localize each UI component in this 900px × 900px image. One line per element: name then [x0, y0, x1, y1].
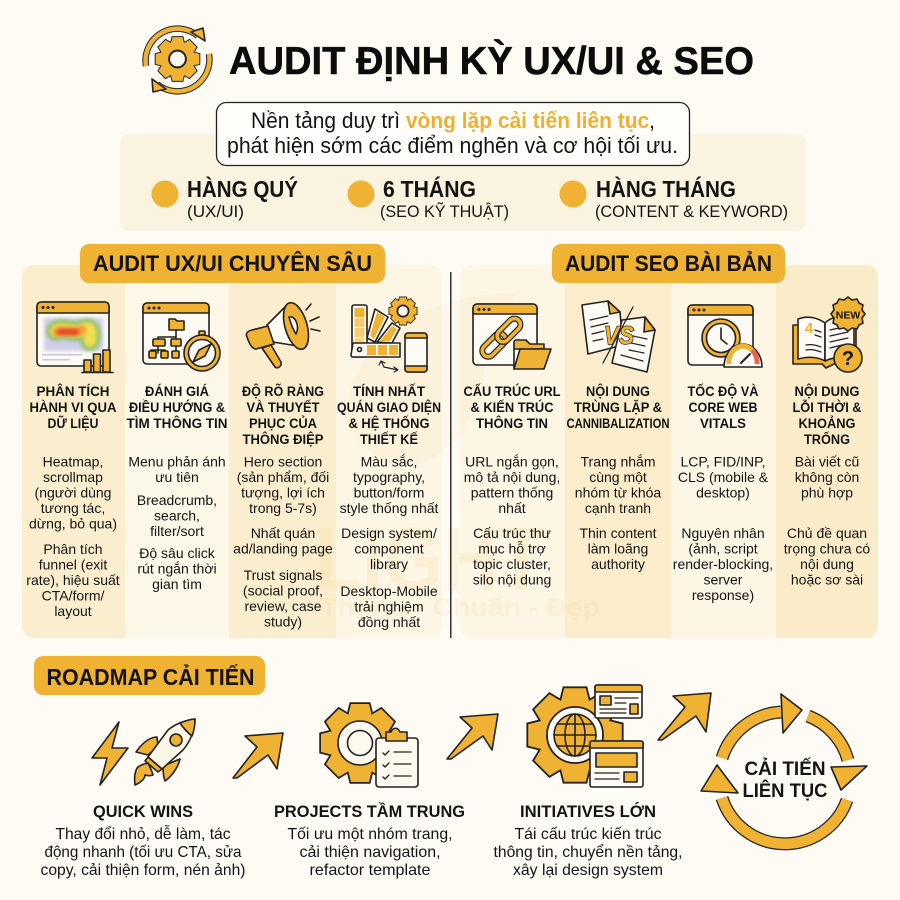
icon: book, new badge and question: 4 — [805, 320, 814, 337]
cycle: continuous improvement: LIÊN TỤC — [742, 780, 828, 802]
text: tượng, lợi ích — [241, 484, 325, 500]
column: speed — [673, 305, 773, 603]
text: Chủ đề quan — [787, 525, 867, 541]
description — [288, 826, 452, 879]
heading — [464, 382, 561, 432]
icon: gear and clipboard — [321, 704, 418, 787]
text: response) — [692, 587, 754, 603]
watermark: Thông - Chuẩn - Đẹp — [320, 594, 600, 622]
heading: HÀNH VI QUA — [30, 399, 116, 416]
text: rút ngắn thời — [137, 560, 217, 576]
subtitle box: phát hiện sớm các điểm nghẽn và cơ hội tối ưu. — [227, 133, 678, 158]
text: typography, — [353, 469, 425, 485]
watermark: LIGHT — [315, 510, 545, 610]
text: hoặc sơ sài — [791, 572, 863, 588]
text: Design system/ — [341, 525, 437, 541]
heading: audit SEO: AUDIT SEO BÀI BẢN — [565, 251, 772, 276]
text: nội dung — [800, 556, 854, 572]
icon: gear, globe and windows — [528, 685, 643, 787]
frequency: quarterly — [152, 175, 298, 221]
text: tương tác, — [41, 500, 105, 516]
column: duplicate content — [566, 301, 670, 572]
panel: left audit background — [22, 265, 442, 638]
description — [40, 824, 246, 879]
text — [784, 454, 870, 588]
text: (social proof, — [243, 582, 323, 598]
text: dừng, bỏ qua) — [29, 516, 117, 532]
text: review, case — [244, 598, 322, 614]
arrow: step two to three — [447, 714, 498, 759]
heading: NỘI DUNG — [586, 382, 650, 400]
description: Tái cấu trúc kiến trúc — [514, 826, 662, 843]
heading: VÀ THUYẾT — [246, 399, 320, 416]
heading: THÔNG TIN — [476, 414, 548, 432]
text: component — [354, 540, 424, 556]
text: funnel (exit — [39, 556, 107, 572]
text: button/form — [354, 484, 424, 500]
panel: audit frequency — [120, 134, 806, 231]
heading: TRÙNG LẶP & — [574, 398, 662, 416]
subtitle box: Nền tảng duy trì vòng lặp cải tiến liên tục, — [251, 108, 655, 133]
text: ưu tiên — [155, 469, 199, 485]
description: cải thiện navigation, — [300, 844, 440, 861]
heading: CẤU TRÚC URL — [464, 382, 561, 400]
heading — [688, 382, 758, 432]
frequency: six months: (SEO KỸ THUẬT) — [380, 202, 509, 221]
heading: VITALS — [700, 416, 746, 432]
text: trải nghiệm — [354, 598, 424, 614]
text: CTA/form/ — [42, 588, 104, 604]
text: Màu sắc, — [361, 454, 417, 470]
column: outdated content — [784, 297, 870, 588]
heading: NỘI DUNG — [794, 382, 860, 400]
description: xây lại design system — [513, 862, 663, 879]
heading: QUÁN GIAO DIỆN — [337, 398, 441, 416]
text — [233, 454, 333, 630]
text: trong 5-7s) — [249, 500, 317, 516]
heading: & KIẾN TRÚC — [470, 398, 554, 416]
description: Thay đổi nhỏ, dễ làm, tác — [56, 824, 231, 843]
heading: LỖI THỜI & — [792, 398, 862, 416]
icon: clock and gauge — [688, 305, 762, 367]
description: refactor template — [310, 862, 430, 879]
center divider — [450, 272, 452, 638]
text: đồng nhất — [358, 614, 420, 630]
column: design consistency — [337, 297, 441, 630]
text: study) — [264, 614, 302, 630]
text: silo nội dung — [473, 572, 551, 588]
heading: ĐỘ RÕ RÀNG — [242, 382, 324, 400]
text: CLS (mobile & — [678, 469, 769, 485]
text: nhất — [498, 500, 526, 516]
heading: THÔNG ĐIỆP — [242, 430, 324, 448]
icon: lightning and rocket — [92, 719, 195, 785]
frequency: monthly: HÀNG THÁNG — [596, 175, 736, 202]
text: server — [704, 572, 743, 588]
heading: audit SEO — [552, 244, 785, 283]
heading — [792, 382, 862, 448]
text: search, — [154, 508, 200, 524]
text: style thống nhất — [340, 500, 439, 516]
text: Breadcrumb, — [137, 492, 217, 508]
description: copy, cải thiện form, nén ảnh) — [40, 862, 246, 879]
text: Phân tích — [43, 541, 103, 557]
description — [494, 826, 682, 879]
arrow: step one to two — [233, 733, 283, 778]
frequency: monthly — [560, 175, 788, 221]
icon: chain and folder — [473, 304, 551, 369]
text: Bài viết cũ — [795, 454, 859, 470]
heading — [566, 382, 670, 432]
text: (người dùng — [35, 484, 111, 500]
heading: TỐC ĐỘ VÀ — [688, 382, 758, 400]
icon: heatmap window — [37, 302, 113, 372]
heading — [242, 382, 324, 448]
text — [26, 454, 120, 619]
text: (ảnh, script — [688, 540, 758, 556]
heading: ĐIỀU HƯỚNG & — [129, 398, 225, 416]
text: Hero section — [244, 454, 322, 470]
text: scrollmap — [43, 469, 103, 485]
heading: audit UX/UI — [80, 244, 385, 283]
text: trọng chưa có — [784, 540, 870, 556]
text: authority — [591, 556, 645, 572]
label: QUICK WINS — [93, 802, 193, 821]
text — [673, 454, 773, 603]
frequency: quarterly: HÀNG QUÝ — [187, 175, 298, 202]
text: Trust signals — [244, 567, 322, 583]
text: Nguyên nhân — [681, 525, 765, 541]
heading: TÌM THÔNG TIN — [126, 414, 228, 432]
heading: roadmap: ROADMAP CẢI TIẾN — [46, 662, 254, 690]
frequency: six months: 6 THÁNG — [383, 175, 476, 202]
column: navigation — [126, 303, 228, 592]
step: initiatives — [494, 685, 682, 879]
heading: ĐÁNH GIÁ — [145, 383, 209, 400]
text: Độ sâu click — [139, 545, 216, 561]
text: URL ngắn gọn, — [465, 454, 559, 470]
icon: gear with cycle arrows — [146, 28, 209, 92]
text: LCP, FID/INP, — [680, 454, 766, 470]
cycle: continuous improvement — [701, 694, 867, 844]
icon: two documents versus: VS — [604, 322, 634, 350]
column: URL structure — [464, 304, 561, 588]
subtitle box — [216, 102, 690, 166]
icon: two documents versus — [582, 301, 655, 372]
icon: book, new badge and question: ? — [842, 348, 854, 370]
label: PROJECTS TẦM TRUNG — [274, 802, 465, 821]
heading — [126, 383, 228, 432]
text — [464, 454, 560, 588]
description: động nhanh (tối ưu CTA, sửa — [44, 844, 242, 861]
heading: DỮ LIỆU — [48, 414, 98, 432]
text: Thin content — [579, 525, 657, 541]
text: mô tả nội dung, — [464, 469, 560, 485]
heading — [337, 383, 441, 448]
text: Trang nhắm — [581, 454, 655, 470]
text: desktop) — [696, 484, 750, 500]
text: library — [370, 556, 408, 572]
icon: book, new badge and question — [793, 297, 865, 372]
text: không còn — [795, 469, 859, 485]
heading: PHÂN TÍCH — [36, 382, 110, 400]
panel: right audit background — [460, 265, 878, 638]
text: render-blocking, — [673, 556, 773, 572]
watermark — [315, 292, 600, 622]
text: Menu phản ánh — [128, 454, 226, 470]
arrow: step three to cycle — [658, 693, 711, 740]
text: mục hỗ trợ — [478, 540, 546, 556]
text: nhóm từ khóa — [575, 484, 661, 500]
text: pattern thống — [471, 484, 553, 500]
text: topic cluster, — [473, 556, 551, 572]
text: cùng một — [589, 469, 647, 485]
description: thông tin, chuyển nền tảng, — [494, 843, 682, 861]
heading — [30, 382, 116, 432]
heading: TÍNH NHẤT — [353, 383, 425, 400]
heading: & HỆ THỐNG — [348, 414, 430, 432]
column: behaviour analysis — [26, 302, 120, 619]
text — [575, 454, 661, 572]
heading: KHOẢNG — [798, 415, 856, 432]
icon: swatches, gear and phone — [351, 297, 427, 372]
text: gian tìm — [152, 576, 202, 592]
text — [340, 454, 439, 630]
heading: TRỐNG — [804, 430, 850, 448]
text: cạnh tranh — [585, 500, 651, 516]
icon: book, new badge and question: NEW — [836, 310, 860, 322]
text: ad/landing page — [233, 540, 333, 556]
text: rate), hiệu suất — [26, 572, 120, 588]
heading: CORE WEB — [688, 400, 758, 416]
icon: megaphone — [246, 300, 320, 368]
text: làm loãng — [588, 540, 648, 556]
text — [128, 454, 226, 592]
heading: CANNIBALIZATION — [566, 416, 670, 432]
text: layout — [54, 603, 92, 619]
column: messaging — [233, 300, 333, 630]
text: Heatmap, — [43, 454, 103, 470]
step: quick wins — [40, 719, 246, 879]
title: AUDIT ĐỊNH KỲ UX/UI & SEO — [229, 39, 754, 83]
text: (sản phẩm, đối — [237, 469, 329, 485]
heading: PHỤC CỦA — [249, 414, 317, 432]
frequency: quarterly: (UX/UI) — [187, 202, 244, 221]
cycle: continuous improvement: CẢI TIẾN — [744, 758, 826, 780]
text: phù hợp — [801, 484, 853, 500]
heading: roadmap — [34, 656, 265, 695]
heading: THIẾT KẾ — [360, 431, 418, 448]
heading: audit UX/UI: AUDIT UX/UI CHUYÊN SÂU — [93, 251, 372, 276]
label: INITIATIVES LỚN — [520, 802, 656, 821]
text: filter/sort — [150, 523, 204, 539]
text: Cấu trúc thư — [473, 525, 551, 541]
description: Tối ưu một nhóm trang, — [288, 826, 452, 843]
frequency: six months — [348, 175, 509, 221]
text: Desktop-Mobile — [340, 583, 438, 599]
text: Nhất quán — [251, 525, 315, 541]
step: projects — [274, 704, 465, 879]
icon: sitemap and compass — [143, 303, 220, 371]
frequency: monthly: (CONTENT & KEYWORD) — [595, 202, 788, 221]
